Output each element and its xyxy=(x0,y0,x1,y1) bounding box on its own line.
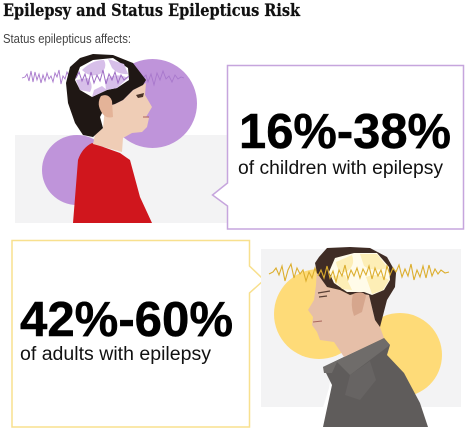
subtitle: Status epilepticus affects: xyxy=(3,32,131,46)
callout: children xyxy=(212,66,464,229)
panel: child illustration xyxy=(15,54,228,223)
callout: adults xyxy=(12,240,264,427)
brain wave over brain xyxy=(76,70,129,85)
adult figure xyxy=(308,247,428,427)
left yellow circle xyxy=(274,269,364,359)
callout box xyxy=(12,240,264,427)
brain icon xyxy=(329,253,390,295)
gray background panel xyxy=(15,135,228,223)
title: Epilepsy and Status Epilepticus Risk xyxy=(3,1,301,21)
panel: adult illustration xyxy=(261,247,461,427)
statistic label: of children with epilepsy xyxy=(238,158,444,179)
brain icon xyxy=(75,58,129,97)
brain wave xyxy=(269,264,449,281)
child figure xyxy=(66,54,152,223)
right yellow circle xyxy=(358,313,442,397)
brain wave xyxy=(22,70,184,85)
large purple circle xyxy=(108,59,197,148)
statistic: 42%-60% xyxy=(20,293,233,347)
brain wave over brain xyxy=(318,265,396,282)
statistic: 16%-38% xyxy=(239,105,451,159)
statistic label: of adults with epilepsy xyxy=(20,344,212,365)
small purple circle xyxy=(42,135,112,205)
gray background panel xyxy=(261,249,461,407)
callout box xyxy=(212,66,464,229)
